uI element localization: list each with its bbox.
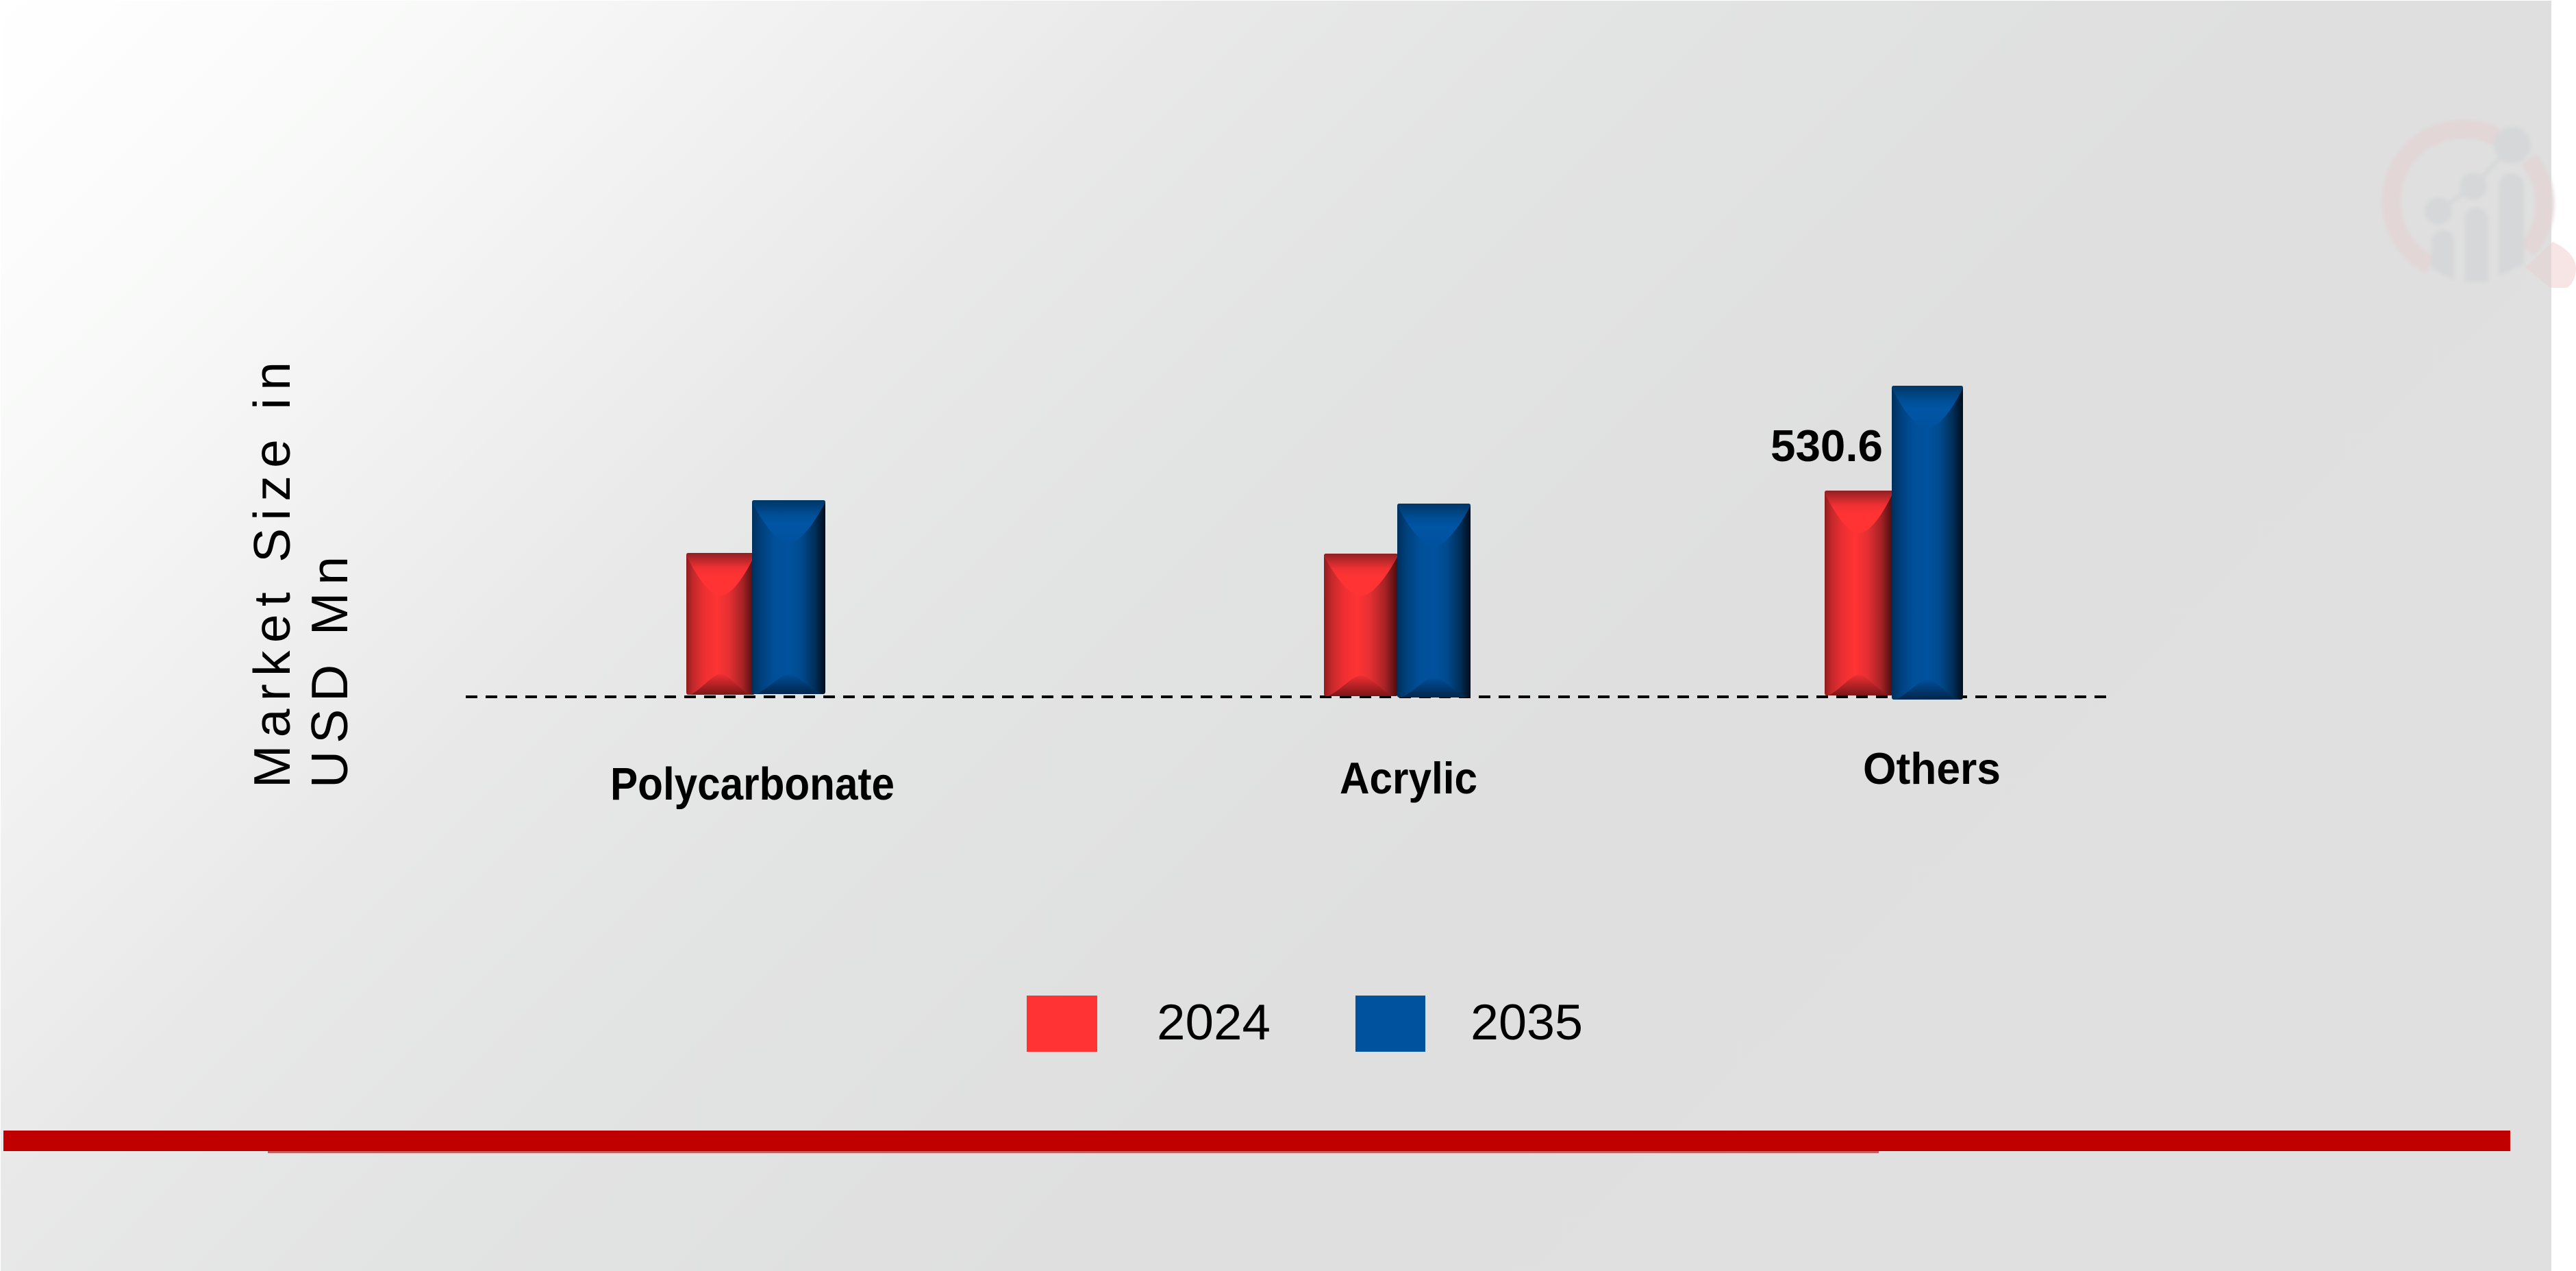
bar group: Others — [1825, 386, 1963, 700]
legend — [1027, 995, 1583, 1052]
bar: Polycarbonate 2024 — [686, 553, 755, 695]
bar: Polycarbonate 2035 — [752, 500, 825, 694]
legend label: 2024: 2024 — [1157, 995, 1271, 1050]
footer bar — [3, 1131, 2510, 1153]
legend label: 2035: 2035 — [1471, 995, 1583, 1050]
y axis title — [243, 362, 358, 788]
bar group: Polycarbonate — [686, 500, 825, 695]
category label: Polycarbonate: Polycarbonate — [610, 758, 895, 810]
data label: 530.6: 530.6 — [1771, 421, 1883, 471]
bar group: Acrylic — [1324, 504, 1471, 698]
legend swatch: 2024 — [1027, 996, 1097, 1052]
bar: Others 2024 — [1825, 491, 1893, 695]
bar: Acrylic 2024 — [1324, 554, 1398, 696]
category label: Others: Others — [1863, 743, 2001, 793]
bar: Acrylic 2035 — [1397, 504, 1471, 698]
legend swatch: 2035 — [1355, 996, 1425, 1052]
icon: watermark logo — [2391, 127, 2576, 288]
bar: Others 2035 — [1892, 386, 1963, 700]
category label: Acrylic: Acrylic — [1340, 753, 1477, 803]
baseline: dashed axis — [466, 695, 2108, 698]
y axis title: USD Mn — [301, 556, 358, 788]
y axis title: Market Size in — [243, 362, 301, 788]
